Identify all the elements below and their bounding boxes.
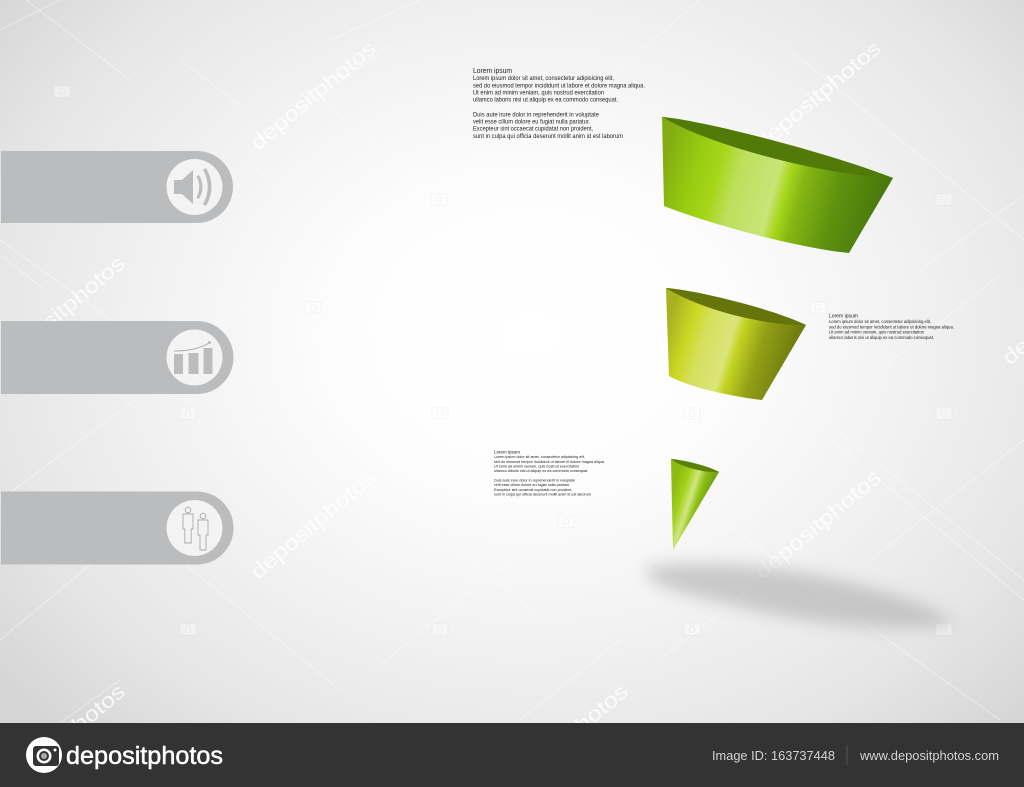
text block: bottom: Lorem ipsum dolor sit amet, consectetur adipisicing elit, xyxy=(494,454,585,459)
text block: middle: ullamco laboris nisi ut aliquip ex ea commodo consequat. xyxy=(829,335,934,340)
text block: top: ullamco laboris nisi ut aliquip ex ea commodo consequat. xyxy=(473,98,618,104)
watermark logos: depositphotos xyxy=(751,466,886,584)
icon: people xyxy=(183,507,208,550)
text block: top: Lorem ipsum xyxy=(473,68,512,75)
shadow xyxy=(644,563,955,627)
text block: top: Duis aute irure dolor in reprehenderit in voluptate xyxy=(473,112,600,118)
logo wordmark: depositphotos xyxy=(66,742,223,770)
text block: top: Lorem ipsum dolor sit amet, consectetur adipisicing elit, xyxy=(473,76,614,82)
logo icon: camera xyxy=(26,737,62,773)
text block: top: velit esse cillum dolore eu fugiat nulla pariatur. xyxy=(473,120,590,126)
icon: speaker xyxy=(174,168,212,206)
text block: bottom: velit esse cillum dolore eu fugiat nulla pariatur. xyxy=(494,482,570,487)
text block: top: Excepteur sint occaecat cupidatat non proident, xyxy=(473,126,593,132)
middle opening xyxy=(666,288,806,325)
text block: bottom: Ut enim ad minim veniam, quis nostrud exercitation xyxy=(494,464,579,468)
watermark camera icons xyxy=(54,86,952,635)
text block: middle: Lorem ipsum dolor sit amet, consectetur adipisicing elit, xyxy=(829,319,931,324)
text block: bottom: Excepteur sint occaecat cupidatat non proident, xyxy=(494,487,572,492)
panel: people bar xyxy=(1,492,234,564)
text block: middle: sed do eiusmod tempor incididunt ut labore et dolore magna aliqua. xyxy=(829,324,954,329)
text block: bottom: Duis aute irure dolor in reprehenderit in voluptate xyxy=(494,478,576,482)
text block: top xyxy=(473,68,645,140)
text block: middle: Lorem ipsum xyxy=(829,314,859,320)
bottom green cone xyxy=(671,459,719,550)
text block: middle: Ut enim ad minim veniam, quis nostrud exercitation xyxy=(829,330,924,334)
text block: top: sunt in culpa qui officia deserunt mollit anim id est laborum xyxy=(473,134,623,140)
middle green slice xyxy=(666,288,806,400)
text block: middle xyxy=(829,314,954,340)
text block: bottom xyxy=(494,450,605,496)
watermark logos: depositphotos xyxy=(246,37,381,155)
watermark logos: depositphotos xyxy=(751,37,886,155)
text block: top: Ut enim ad minim veniam, quis nostrud exercitation xyxy=(473,90,604,96)
text block: top: sed do eiusmod tempor incididunt ut labore et dolore magna aliqua. xyxy=(473,84,645,90)
text block: bottom: sed do eiusmod tempor incididunt ut labore et dolore magna aliqua. xyxy=(494,459,605,464)
icon: bar chart xyxy=(174,341,212,374)
top opening xyxy=(662,117,893,178)
image id: Image ID: 163737448 xyxy=(712,748,835,763)
watermark logos: depositphotos xyxy=(246,466,381,584)
text block: bottom: sunt in culpa qui officia deserunt mollit anim id est laborum xyxy=(494,492,592,496)
cone opening xyxy=(671,459,719,472)
website: www.depositphotos.com xyxy=(859,748,999,763)
text block: bottom: ullamco laboris nisi ut aliquip ex ea commodo consequat. xyxy=(494,468,588,473)
top green slice xyxy=(662,117,893,253)
text block: bottom: Lorem ipsum xyxy=(494,450,520,456)
panel: speaker bar xyxy=(1,151,233,223)
panel: chart bar xyxy=(1,321,234,394)
footer bar xyxy=(0,723,1024,787)
watermark logos: depositphotos xyxy=(498,252,633,370)
